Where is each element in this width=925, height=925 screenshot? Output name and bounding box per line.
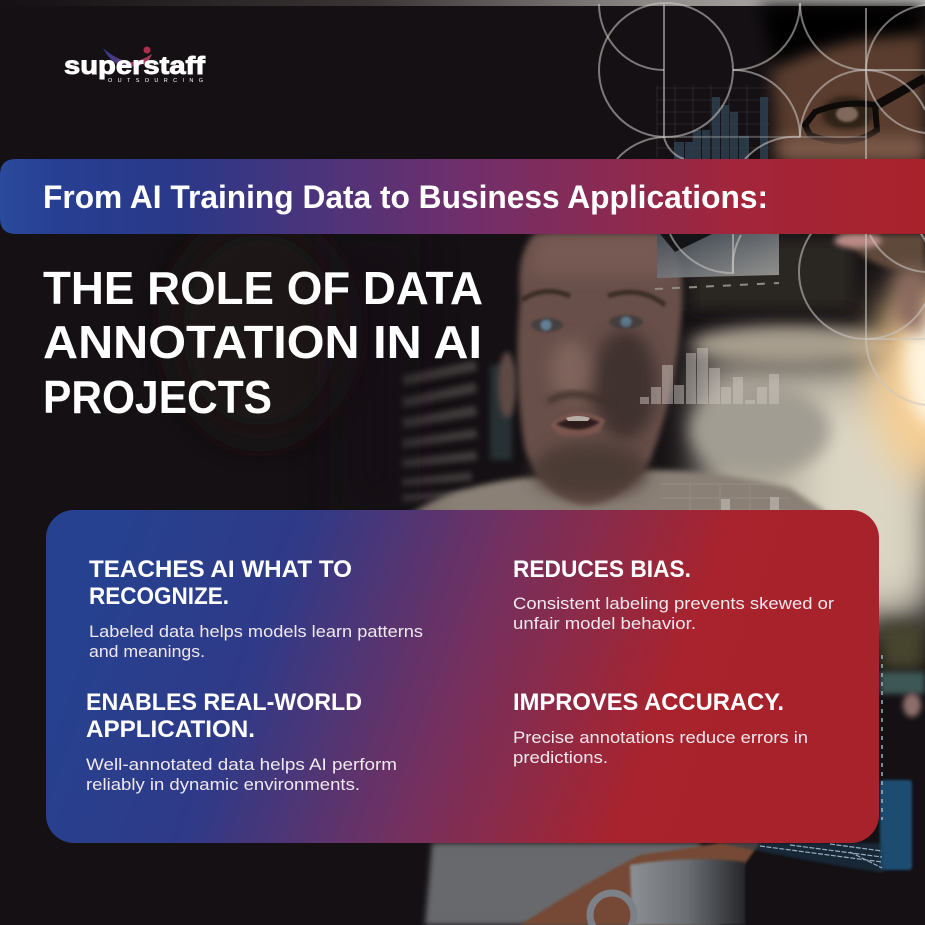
logo tagline: OUTSOURCING: [108, 78, 203, 84]
item: improves accuracy: [513, 689, 808, 767]
photo: window blinds behind man: [402, 360, 477, 502]
overlay chart: translucent bars: [640, 348, 779, 404]
banner: [0, 159, 925, 234]
photo: lower scene with shirt, arm and mug: [425, 655, 921, 925]
item: reduces bias: [513, 556, 835, 633]
item: teaches AI what to recognize: TEACHES AI WHAT TO: [89, 556, 352, 583]
item: reduces bias: Consistent labeling prevents skewed or: [513, 595, 835, 613]
banner heading: From AI Training Data to Business Applications:: [43, 179, 768, 215]
overlay chart: top bars and grid: [657, 85, 770, 159]
item: enables real-world application: APPLICATION.: [86, 716, 255, 743]
overlay chart: small grid above panel: [660, 484, 790, 510]
item: enables real-world application: reliably in dynamic environments.: [86, 776, 360, 794]
dark wash over photo left edge: [330, 230, 420, 520]
main title: PROJECTS: [43, 371, 272, 423]
photo: man with glasses at top right: [760, 6, 925, 335]
photo: central man: [410, 234, 830, 515]
item: enables real-world application: [86, 689, 397, 794]
main title: [43, 262, 483, 423]
logo wordmark: superstaff: [64, 52, 206, 80]
item: improves accuracy: IMPROVES ACCURACY.: [513, 689, 784, 716]
photo: second faded figure on left: [170, 220, 350, 440]
icon: logo swoosh: [103, 46, 152, 67]
item: improves accuracy: predictions.: [513, 749, 608, 767]
item: teaches AI what to recognize: Labeled data helps models learn patterns: [89, 623, 423, 641]
item: improves accuracy: Precise annotations reduce errors in: [513, 729, 808, 747]
item: teaches AI what to recognize: and meanings.: [89, 643, 205, 661]
photo: teal wall beside man: [490, 365, 512, 460]
logo: [64, 46, 206, 84]
item: reduces bias: REDUCES BIAS.: [513, 556, 691, 583]
overlay chart: lower shaded area: [655, 234, 779, 289]
main title: ANNOTATION IN AI: [43, 316, 482, 368]
main title: THE ROLE OF DATA: [43, 262, 483, 314]
item: enables real-world application: Well-annotated data helps AI perform: [86, 756, 397, 774]
item: teaches AI what to recognize: RECOGNIZE.: [89, 583, 229, 610]
item: enables real-world application: ENABLES REAL-WORLD: [86, 689, 362, 716]
decorative line pattern: [599, 3, 925, 405]
item: reduces bias: unfair model behavior.: [513, 615, 696, 633]
top light strip: [0, 0, 925, 6]
item: teaches AI what to recognize: [89, 556, 423, 661]
panel: benefits: [46, 510, 879, 843]
photo: background glow at right: [690, 238, 925, 694]
